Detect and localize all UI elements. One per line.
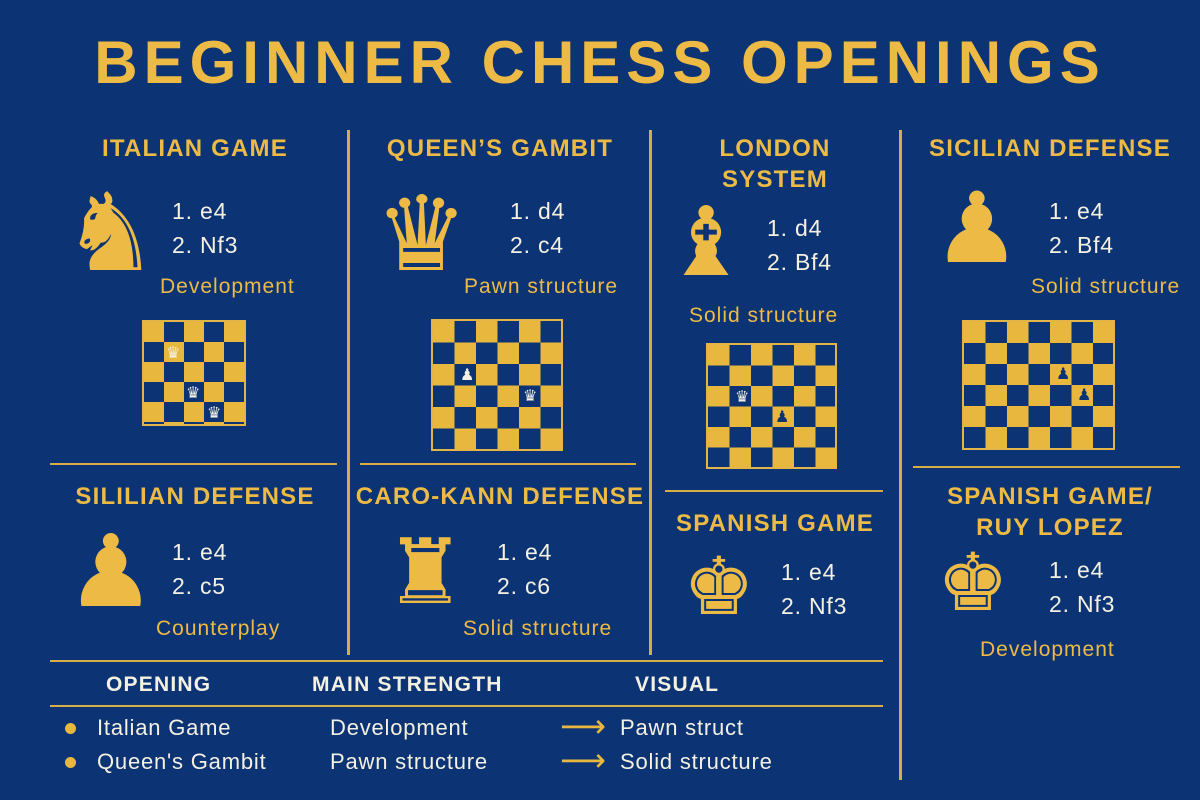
board (431, 319, 563, 451)
heading: spanish game / ruy lopez: RUY LOPEZ (976, 514, 1124, 541)
board: ♛ (166, 343, 180, 362)
moves: 2. c6 (497, 573, 551, 599)
panel: sililian defense (66, 483, 315, 640)
moves: 1. e4 (781, 559, 836, 585)
icon: pawn: ♟ (66, 513, 156, 630)
moves: 2. c5 (172, 573, 226, 599)
panel: sicilian defense (929, 135, 1180, 450)
moves (172, 539, 227, 599)
moves (767, 215, 832, 275)
label: Development (160, 275, 295, 298)
moves (497, 539, 552, 599)
icon: pawn: ♟ (933, 172, 1021, 286)
heading: spanish game / ruy lopez: SPANISH GAME/ (947, 483, 1153, 510)
label: Counterplay (156, 617, 280, 640)
icon: rook: ♜ (385, 520, 466, 625)
moves: 2. Bf4 (1049, 232, 1114, 258)
panel: spanish game (676, 510, 874, 633)
moves: 2. Bf4 (767, 249, 832, 275)
table header (106, 673, 719, 696)
row: queen's gambit: ⟶ (560, 741, 606, 779)
moves (1049, 557, 1115, 617)
board (142, 320, 246, 426)
label: Development (980, 638, 1115, 661)
board: ♛ (186, 383, 200, 402)
title: BEGINNER CHESS OPENINGS (94, 29, 1106, 96)
icon: queen: ♛ (375, 173, 468, 295)
row: italian game: ⟶ (560, 707, 606, 745)
row: queen's gambit (65, 741, 773, 779)
icon: king: ♚ (683, 540, 755, 633)
row: queen's gambit: Solid structure (620, 749, 773, 774)
board: ♛ (735, 387, 749, 406)
panel: caro-kann defense (356, 483, 644, 640)
icon: knight: ♞ (62, 171, 159, 296)
board: ♟ (1056, 364, 1070, 383)
moves: 2. Nf3 (1049, 591, 1115, 617)
panel: london system (663, 135, 838, 469)
label: Solid structure (689, 304, 838, 327)
moves (172, 198, 238, 258)
moves: 2. c4 (510, 232, 564, 258)
heading: spanish game / ruy lopez (947, 483, 1153, 541)
moves: 1. d4 (510, 198, 565, 224)
board: ♟ (460, 365, 474, 384)
moves: 2. Nf3 (172, 232, 238, 258)
heading: london system: SYSTEM (722, 166, 828, 193)
panel: queen's gambit (375, 135, 618, 451)
board: ♛ (523, 386, 537, 405)
board: ♟ (207, 363, 221, 382)
row: italian game (65, 707, 744, 745)
moves (1049, 198, 1114, 258)
moves: 1. e4 (1049, 198, 1104, 224)
table header: VISUAL (635, 673, 719, 696)
heading: queen's gambit: QUEEN’S GAMBIT (387, 135, 613, 162)
row: italian game: Pawn struct (620, 715, 744, 740)
heading: sililian defense: SILILIAN DEFENSE (75, 483, 315, 510)
row: italian game: Development (330, 715, 468, 740)
table header: MAIN STRENGTH (312, 673, 503, 696)
moves: 1. e4 (1049, 557, 1104, 583)
board: ♛ (207, 403, 221, 422)
heading: london system (719, 135, 831, 193)
icon: king: ♚ (937, 536, 1009, 629)
moves (781, 559, 847, 619)
table: summary (65, 673, 773, 779)
heading: sicilian defense: SICILIAN DEFENSE (929, 135, 1171, 162)
panel: spanish game / ruy lopez (937, 483, 1153, 661)
label: Pawn structure (464, 275, 618, 298)
label: Solid structure (1031, 275, 1180, 298)
icon: bishop: ♝ (663, 186, 749, 298)
moves (510, 198, 565, 258)
label: Solid structure (463, 617, 612, 640)
moves: 1. e4 (172, 539, 227, 565)
heading: caro-kann defense: CARO-KANN DEFENSE (356, 483, 644, 510)
heading: italian game: ITALIAN GAME (102, 135, 288, 162)
heading: spanish game: SPANISH GAME (676, 510, 874, 537)
board (706, 343, 837, 469)
board: ♟ (1077, 385, 1091, 404)
row: queen's gambit: Pawn structure (330, 749, 488, 774)
board: ♝ (166, 321, 183, 343)
moves: 1. e4 (172, 198, 227, 224)
panel: italian game (62, 135, 295, 426)
moves: 2. Nf3 (781, 593, 847, 619)
table header: OPENING (106, 673, 211, 696)
moves: 1. e4 (497, 539, 552, 565)
row: italian game: Italian Game (97, 715, 231, 740)
moves: 1. d4 (767, 215, 822, 241)
heading: london system: LONDON (719, 135, 831, 162)
board (962, 320, 1115, 450)
row: queen's gambit: Queen's Gambit (97, 749, 266, 774)
board: ♟ (775, 407, 789, 426)
